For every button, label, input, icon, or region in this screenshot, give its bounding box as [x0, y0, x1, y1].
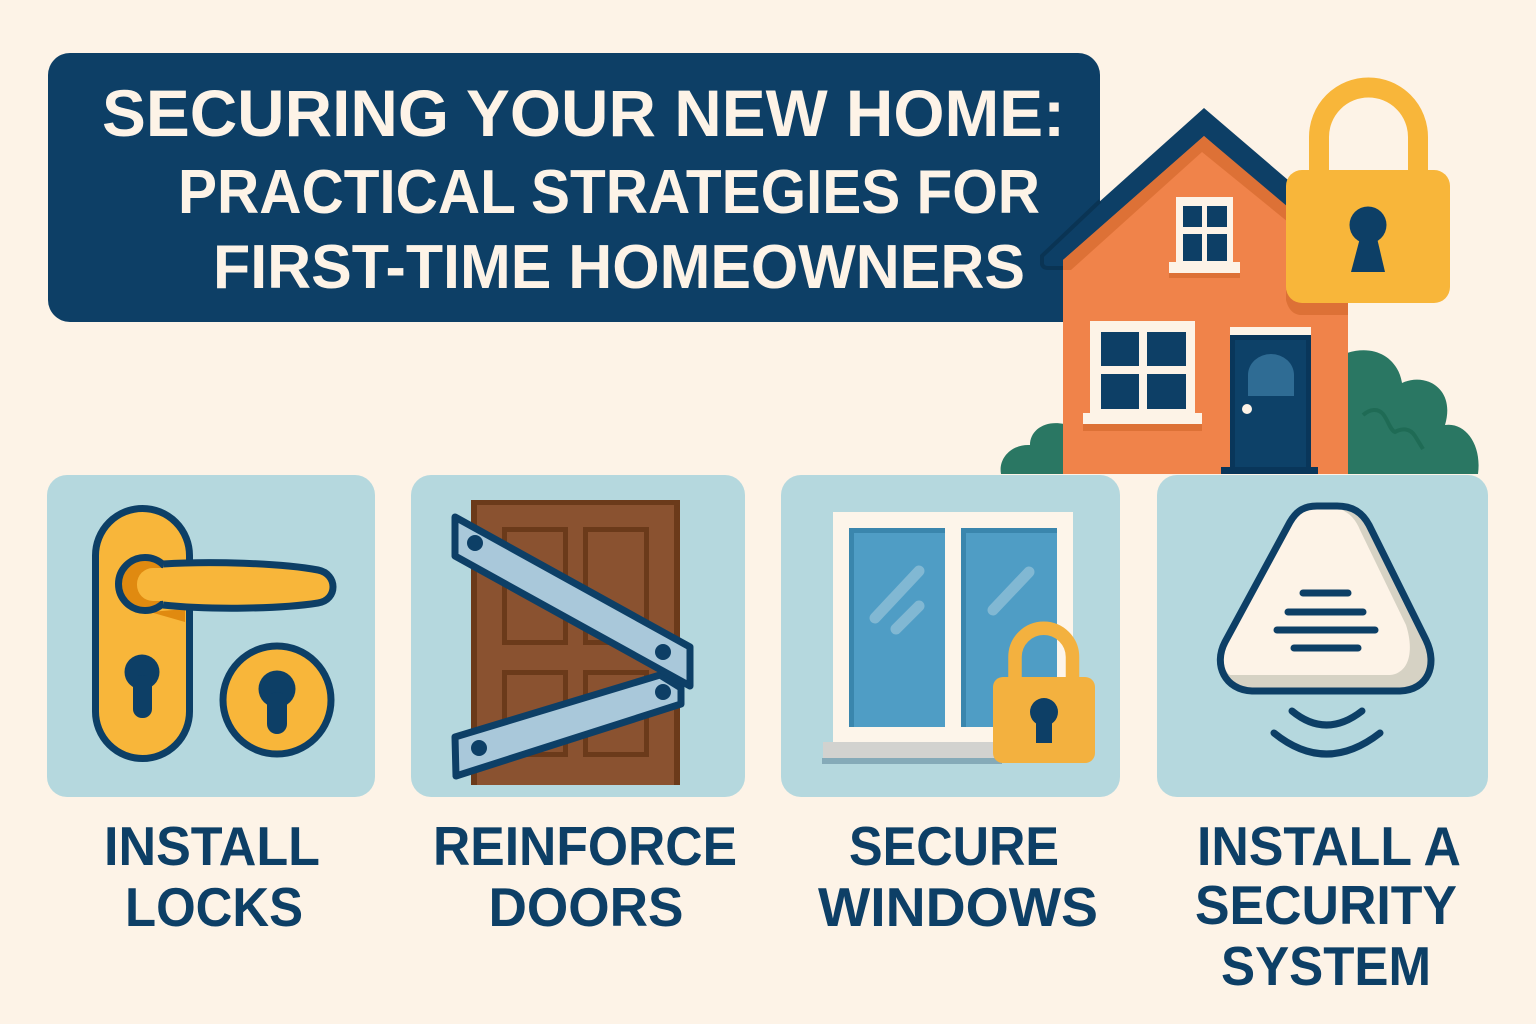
title line 1: SECURING YOUR NEW HOME:: [102, 76, 1065, 150]
padlock: [1286, 88, 1450, 303]
label: secure windows: WINDOWS: [818, 876, 1098, 938]
roof shadow: [1063, 136, 1288, 270]
label: install locks: [104, 815, 320, 938]
label: secure windows: SECURE: [849, 815, 1059, 877]
attic window: [1169, 197, 1240, 278]
house body: [1063, 136, 1348, 474]
roof eave edge: [1042, 201, 1100, 268]
roof: [1040, 108, 1288, 269]
panel: reinforce doors: [411, 475, 745, 797]
title line 3: FIRST-TIME HOMEOWNERS: [213, 233, 1025, 302]
label: reinforce doors: [433, 815, 737, 938]
large window: [1083, 321, 1202, 431]
label: install a security system: [1195, 815, 1461, 997]
icon: braced door: [455, 500, 690, 785]
label: install a security system: SYSTEM: [1221, 935, 1431, 997]
icon: door handle: [96, 508, 333, 758]
title line 2: PRACTICAL STRATEGIES FOR: [178, 158, 1040, 227]
panel: secure windows: [781, 475, 1120, 797]
label: install a security system: INSTALL A: [1197, 815, 1461, 877]
panel: install a security system: [1157, 475, 1488, 797]
label: reinforce doors: REINFORCE: [433, 815, 737, 877]
label: secure windows: [818, 815, 1098, 938]
label: install a security system: SECURITY: [1195, 874, 1457, 936]
title banner: [48, 53, 1100, 322]
label: install locks: LOCKS: [125, 876, 303, 938]
panel: install locks: [47, 475, 375, 797]
bush detail: [1363, 410, 1423, 449]
bushes: [1001, 350, 1479, 474]
padlock shadow: [1286, 290, 1348, 315]
icon: window with padlock: [822, 512, 1095, 764]
front door: [1221, 327, 1318, 474]
label: install locks: INSTALL: [104, 815, 320, 877]
icon: house with padlock: [1001, 88, 1479, 474]
label: reinforce doors: DOORS: [488, 876, 684, 938]
icon: security sensor: [1220, 506, 1431, 754]
